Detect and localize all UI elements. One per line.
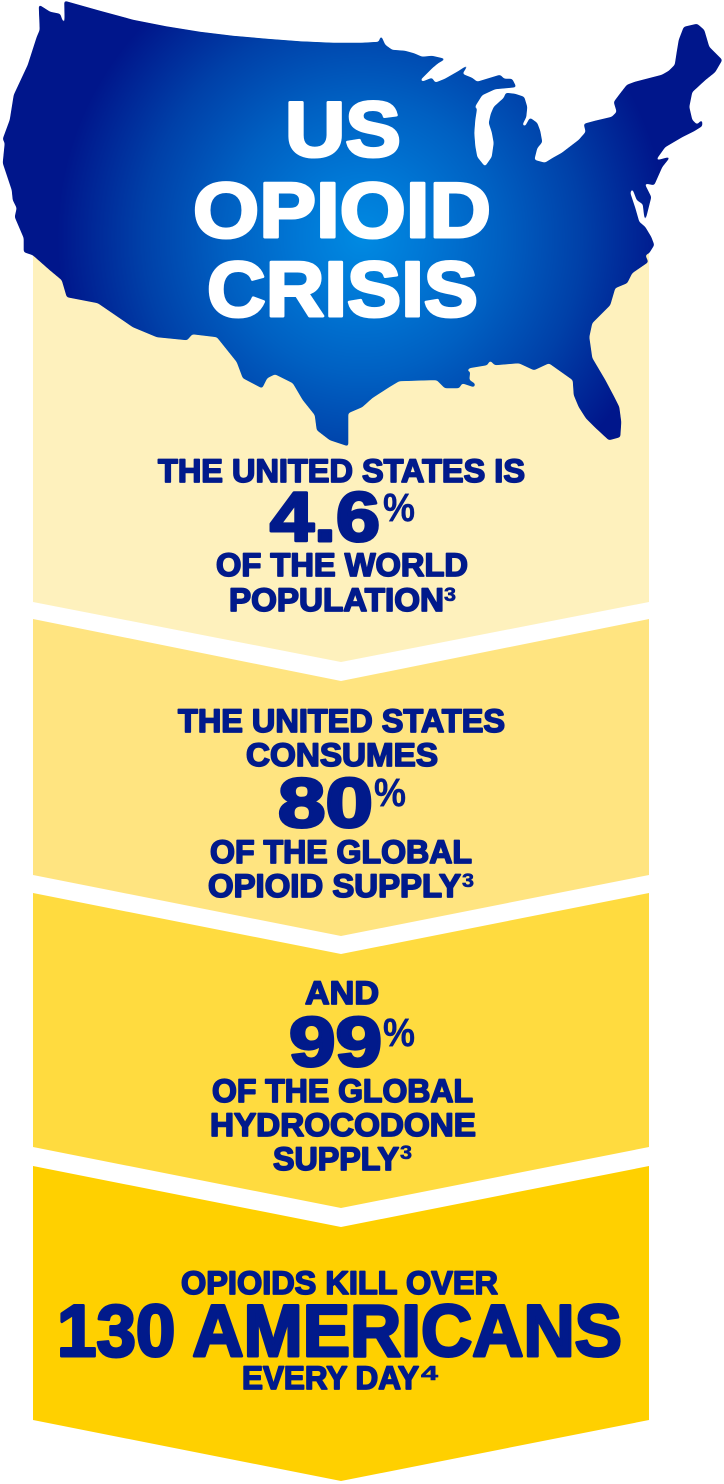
text block: daily deaths stat: EVERY DAY <box>242 1360 419 1396</box>
text block: global hydrocodone supply stat: HYDROCODONE <box>210 1107 476 1143</box>
text block: world population stat <box>158 453 525 618</box>
title <box>193 85 491 333</box>
title: CRISIS <box>207 245 478 333</box>
number: 99 percent: % <box>383 1011 415 1055</box>
text block: world population stat: 3 <box>444 585 456 606</box>
text block: global opioid supply stat <box>178 703 505 904</box>
text block: global opioid supply stat: THE UNITED STATES <box>178 703 505 739</box>
text block: global opioid supply stat: CONSUMES <box>246 737 438 773</box>
text block: global hydrocodone supply stat <box>210 975 476 1177</box>
title: OPIOID <box>193 166 491 254</box>
text block: daily deaths stat: OPIOIDS KILL OVER <box>181 1265 498 1301</box>
map: United States silhouette <box>3 1 722 446</box>
panel: daily deaths chevron <box>33 1166 649 1481</box>
panel: global opioid supply chevron <box>33 619 649 936</box>
number: 4.6 percent: 4.6 <box>270 478 380 556</box>
text block: world population stat: POPULATION <box>229 582 444 618</box>
number: 80 percent <box>278 764 406 842</box>
number: 4.6 percent <box>270 478 415 556</box>
panel: global hydrocodone supply chevron <box>33 893 649 1208</box>
text block: daily deaths stat <box>57 1265 622 1396</box>
text block: global hydrocodone supply stat: AND <box>305 975 379 1011</box>
text block: global hydrocodone supply stat: 3 <box>400 1143 412 1164</box>
text block: global hydrocodone supply stat: SUPPLY <box>273 1141 399 1177</box>
text block: daily deaths stat: 4 <box>421 1363 439 1385</box>
text block: world population stat: OF THE WORLD <box>216 547 468 583</box>
number: 130 Americans: 130 AMERICANS <box>57 1291 622 1372</box>
number: 4.6 percent: % <box>383 486 415 530</box>
text block: global opioid supply stat: OPIOID SUPPLY <box>208 868 461 904</box>
number: 80 percent: 80 <box>278 764 373 842</box>
panel: world population chevron <box>33 250 649 662</box>
text block: global opioid supply stat: OF THE GLOBAL <box>210 834 472 870</box>
number: 99 percent <box>289 1003 415 1081</box>
number: 80 percent: % <box>374 771 406 815</box>
text block: global opioid supply stat: 3 <box>462 871 474 892</box>
title: US <box>285 85 401 173</box>
text block: global hydrocodone supply stat: OF THE GLOBAL <box>212 1073 473 1109</box>
text block: world population stat: THE UNITED STATES IS <box>158 453 525 489</box>
number: 99 percent: 99 <box>289 1003 382 1081</box>
